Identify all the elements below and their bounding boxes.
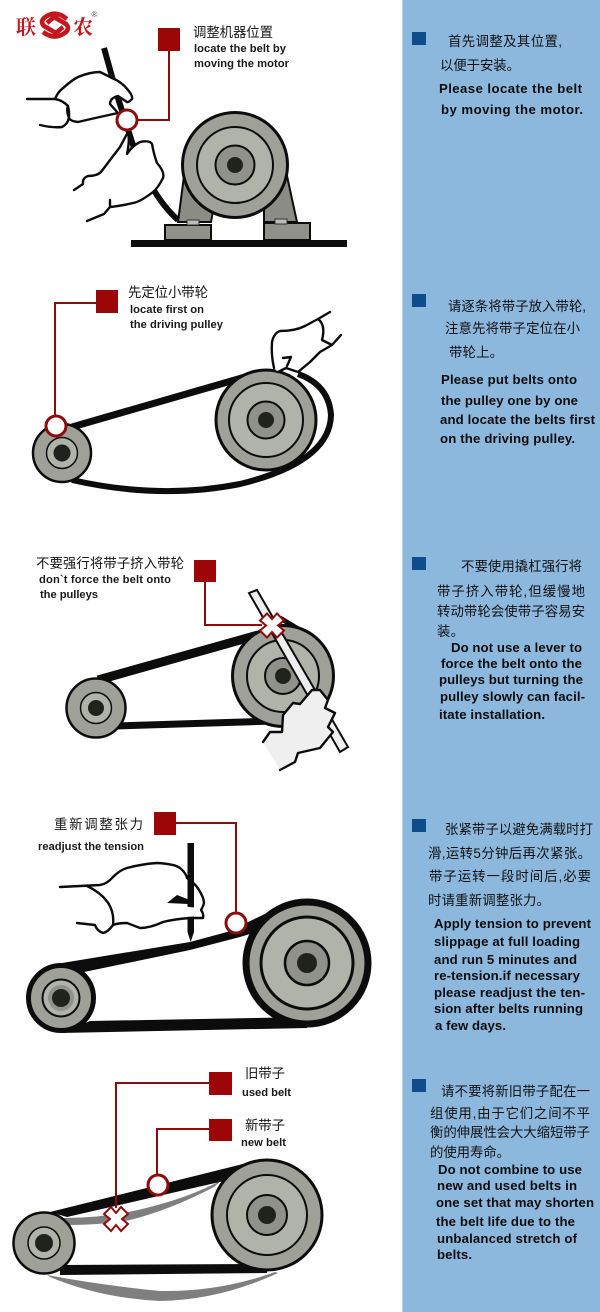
text block: step 4 instructions: re-tension.if necessary: [434, 968, 581, 983]
text block: step 2 instructions: on the driving pulley.: [440, 431, 575, 446]
panel: step 4 readjust tension: [28, 812, 368, 1033]
callout: step 2 marker: [46, 290, 118, 436]
text block: step 1 instructions: by moving the motor.: [441, 102, 583, 117]
illustration: hand fitting belt: [272, 312, 341, 372]
text block: step 3 instructions: 转动带轮会使带子容易安: [437, 603, 585, 619]
heading: step 4 label: readjust the tension: [38, 841, 144, 853]
text block: step 3 instructions: Do not use a lever to: [451, 640, 582, 655]
heading: step 3 label: the pulleys: [40, 589, 98, 601]
heading: step 2 label: locate first on: [130, 304, 204, 316]
logo: [16, 10, 98, 39]
text block: step 4 instructions: a few days.: [435, 1018, 506, 1033]
panel: step 3 do not force belt: [36, 556, 348, 770]
heading: step 4 label: 重新调整张力: [54, 817, 143, 832]
illustration: gloved hand: [263, 690, 335, 770]
heading: step 3 label: [36, 556, 184, 601]
text block: step 4 instructions: Apply tension to prevent: [434, 916, 592, 931]
text block: step 4 instructions: sion after belts running: [434, 1001, 583, 1016]
panel: step 1 adjust motor: [27, 25, 347, 247]
text block: step 5 instructions: 请不要将新旧带子配在一: [441, 1084, 590, 1099]
text block: step 1 instructions: 首先调整及其位置,: [448, 34, 562, 49]
illustration: motor on base: [131, 112, 347, 247]
heading: step 1 label: locate the belt by: [194, 43, 287, 55]
logo: ®: [92, 10, 98, 19]
text block: step 5 instructions: one set that may shorten: [436, 1195, 594, 1210]
text block: step 1 instructions: [412, 32, 583, 117]
callout: used belt marker: [104, 1072, 232, 1231]
illustration: belt held by hands: [27, 48, 178, 221]
text block: step 5 instructions: 的使用寿命。: [430, 1144, 510, 1160]
text block: step 3 instructions: pulleys but turning the: [439, 672, 583, 687]
heading: step 2 label: [128, 285, 224, 331]
text block: step 3 instructions: force the belt onto the: [441, 656, 582, 671]
text block: step 5 instructions: Do not combine to use: [438, 1162, 582, 1177]
text block: step 5 instructions: unbalanced stretch of: [437, 1231, 578, 1246]
callout: step 3 marker: [194, 560, 284, 638]
illustration: hand pressing with pen: [60, 843, 204, 942]
text block: step 2 instructions: Please put belts onto: [441, 372, 577, 387]
text block: step 3 instructions: pulley slowly can facil-: [440, 689, 585, 704]
text block: step 4 instructions: [412, 819, 593, 1033]
text block: step 5 instructions: [412, 1079, 594, 1262]
callout: step 4 marker: [154, 812, 246, 933]
heading: used belt label: 旧带子: [245, 1066, 285, 1081]
text block: step 4 instructions: please readjust the ten-: [434, 985, 585, 1000]
text block: step 3 instructions: 带子挤入带轮,但缓慢地: [437, 583, 585, 599]
text block: step 5 instructions: new and used belts in: [437, 1178, 577, 1193]
text block: step 2 instructions: 请逐条将带子放入带轮,: [448, 298, 586, 314]
text block: step 3 instructions: [412, 557, 585, 722]
heading: new belt label: new belt: [241, 1137, 286, 1149]
heading: step 2 label: 先定位小带轮: [128, 285, 208, 300]
heading: step 2 label: the driving pulley: [130, 319, 224, 331]
heading: step 3 label: 不要强行将带子挤入带轮: [36, 556, 184, 571]
text block: step 1 instructions: Please locate the belt: [439, 81, 583, 96]
heading: new belt label: 新带子: [245, 1118, 285, 1133]
text block: step 2 instructions: 带轮上。: [449, 345, 503, 360]
text block: step 2 instructions: and locate the belts first: [440, 412, 596, 427]
logo: 联: [16, 16, 36, 39]
heading: step 1 label: 调整机器位置: [193, 25, 273, 40]
text block: step 4 instructions: 带子运转一段时间后,必要: [429, 869, 591, 884]
heading: new belt label: [241, 1118, 286, 1149]
text block: step 4 instructions: 张紧带子以避免满载时打: [445, 821, 593, 837]
text block: step 2 instructions: 注意先将带子定位在小: [445, 320, 581, 336]
text block: step 5 instructions: 衡的伸展性会大大缩短带子: [430, 1125, 590, 1140]
text block: step 3 instructions: itate installation.: [439, 707, 545, 722]
text block: step 4 instructions: 滑,运转5分钟后再次紧张。: [428, 845, 591, 861]
text block: step 5 instructions: 组使用,由于它们之间不平: [430, 1105, 590, 1121]
heading: step 4 label: [38, 817, 144, 853]
text block: step 3 instructions: 不要使用撬杠强行将: [461, 558, 582, 574]
logo: 农: [72, 16, 93, 39]
text block: step 3 instructions: 装。: [437, 624, 464, 639]
text block: step 4 instructions: 时请重新调整张力。: [428, 893, 550, 908]
heading: step 3 label: don`t force the belt onto: [39, 574, 171, 586]
heading: step 1 label: moving the motor: [194, 58, 290, 70]
panel: step 2 locate driving pulley: [33, 285, 341, 491]
right instruction column: [402, 0, 600, 1312]
illustration: pulleys and belt: [28, 902, 368, 1033]
illustration: pulleys and belt: [33, 370, 331, 491]
illustration: pulleys with new and used belts: [14, 1160, 322, 1301]
text block: step 5 instructions: the belt life due to the: [436, 1214, 575, 1229]
text block: step 4 instructions: slippage at full loading: [434, 934, 580, 949]
text block: step 1 instructions: 以便于安装。: [440, 58, 520, 73]
text block: step 4 instructions: and run 5 minutes and: [434, 952, 577, 967]
illustration: lever: [249, 590, 348, 752]
text block: step 5 instructions: belts.: [437, 1247, 472, 1262]
heading: used belt label: [242, 1066, 291, 1099]
heading: step 1 label: [193, 25, 290, 70]
text block: step 2 instructions: the pulley one by one: [441, 393, 578, 408]
panel: step 5 used and new belts: [14, 1066, 322, 1301]
heading: used belt label: used belt: [242, 1087, 291, 1099]
callout: step 1 marker: [117, 28, 180, 130]
callout: new belt marker: [148, 1119, 232, 1195]
illustration: pulleys and belt: [66, 618, 334, 738]
text block: step 2 instructions: [412, 294, 596, 446]
